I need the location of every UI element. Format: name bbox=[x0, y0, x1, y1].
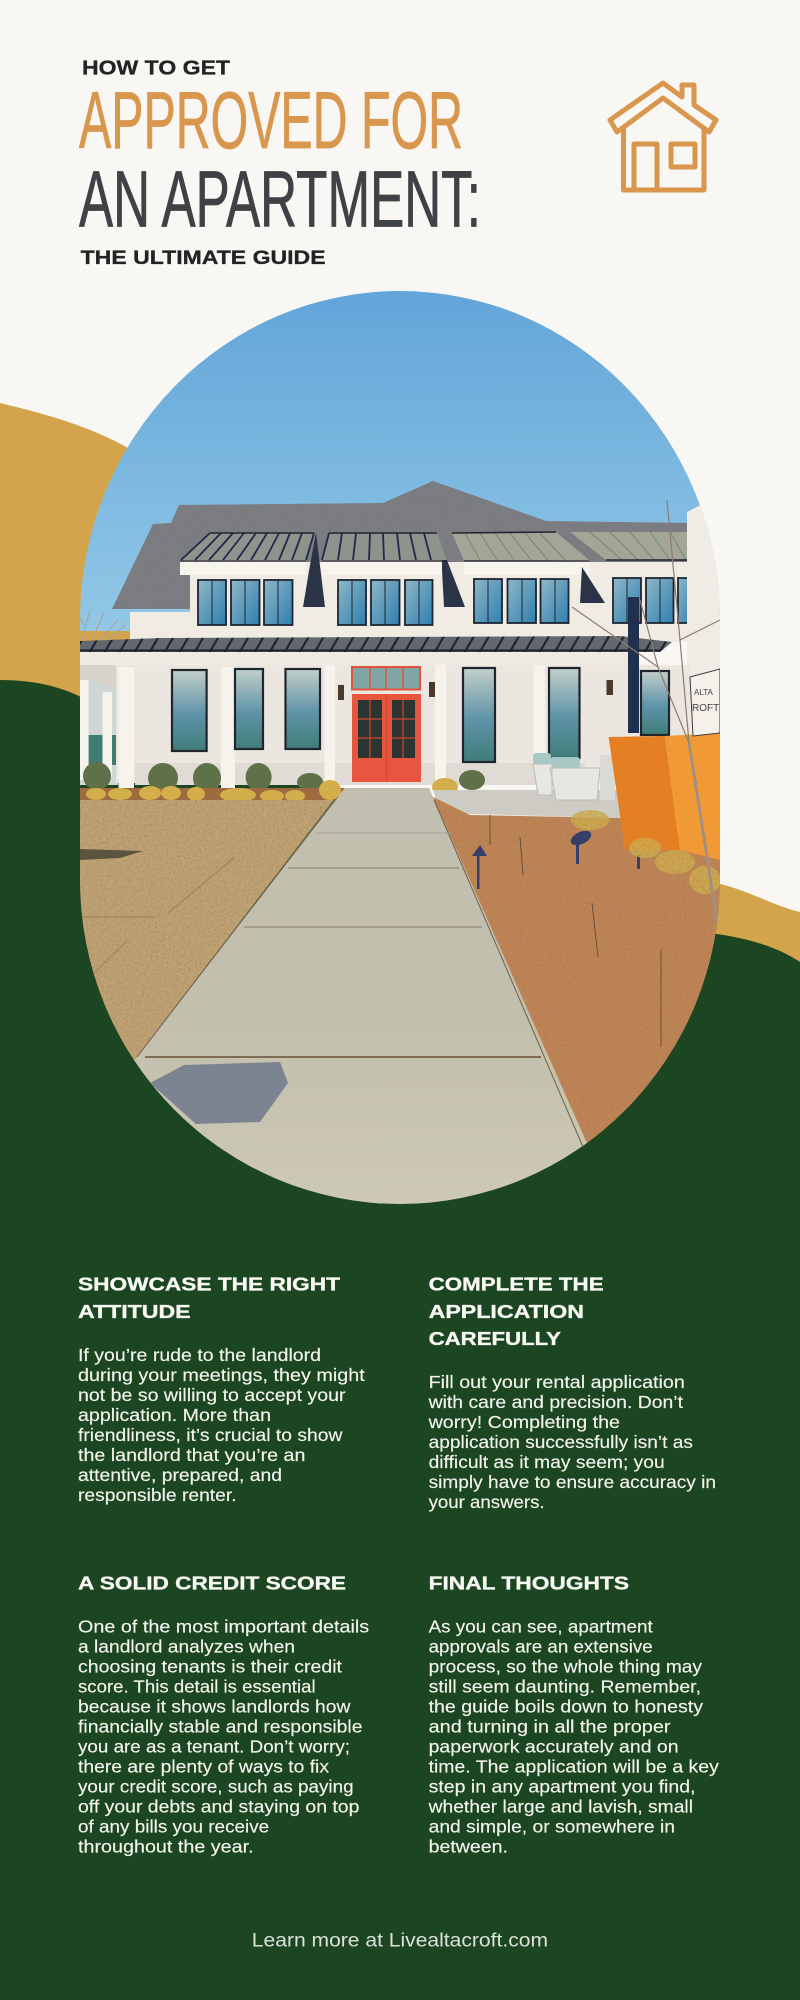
walkway bbox=[100, 788, 590, 1210]
background: dark green lower area bbox=[0, 680, 800, 2000]
body text bbox=[427, 1617, 719, 1857]
ground floor wall bbox=[116, 665, 690, 783]
body text: difficult as it may seem; you bbox=[429, 1452, 665, 1472]
lawn dark patch bbox=[80, 849, 143, 860]
small sprouts in mulch bbox=[490, 815, 661, 1047]
heading: FINAL THOUGHTS bbox=[429, 1572, 629, 1594]
body text: choosing tenants is their credit bbox=[78, 1657, 342, 1677]
stone base bbox=[135, 763, 585, 785]
body text: you are as a tenant. Don’t worry; bbox=[78, 1737, 350, 1757]
background wave: gold left bbox=[0, 403, 135, 720]
body text: If you’re rude to the landlord bbox=[78, 1345, 321, 1365]
title block bbox=[79, 58, 481, 269]
title line: approved for: APPROVED FOR bbox=[79, 76, 463, 166]
yellow plants along the front bbox=[86, 778, 458, 802]
body text: not be so willing to accept your bbox=[78, 1385, 346, 1405]
ground floor windows bbox=[172, 668, 669, 762]
body text: still seem daunting. Remember, bbox=[429, 1677, 701, 1697]
bare tree at right bbox=[572, 500, 720, 923]
bare trees at left bbox=[76, 610, 125, 640]
body text: a landlord analyzes when bbox=[78, 1637, 295, 1657]
heading: CAREFULLY bbox=[429, 1328, 562, 1349]
body text: between. bbox=[429, 1837, 508, 1857]
body text: application successfully isn’t as bbox=[429, 1432, 693, 1452]
bushes bbox=[83, 762, 485, 793]
body text: whether large and lavish, small bbox=[427, 1797, 693, 1817]
upper windows bbox=[198, 578, 693, 625]
text section: showcase the right attitude bbox=[78, 1274, 365, 1505]
front door with transom bbox=[352, 667, 421, 782]
patio concrete bbox=[433, 790, 620, 818]
text section: complete the application carefully bbox=[427, 1274, 716, 1512]
body text: there are plenty of ways to fix bbox=[78, 1757, 329, 1777]
walkway edges and joints bbox=[137, 800, 583, 1147]
porch roof bbox=[80, 636, 672, 652]
heading: SHOWCASE THE RIGHT bbox=[78, 1274, 341, 1295]
landscape lights bbox=[472, 828, 640, 889]
text section: final thoughts bbox=[427, 1572, 719, 1857]
sign: ROFT bbox=[692, 703, 719, 714]
body text bbox=[427, 1372, 716, 1512]
body text: responsible renter. bbox=[78, 1485, 237, 1505]
heading bbox=[429, 1274, 604, 1349]
title line: how to get: HOW TO GET bbox=[82, 58, 230, 80]
body text bbox=[78, 1617, 369, 1857]
text section: a solid credit score bbox=[78, 1572, 369, 1857]
body text: and turning in all the proper bbox=[429, 1717, 671, 1737]
heading: A SOLID CREDIT SCORE bbox=[78, 1572, 346, 1594]
heading: COMPLETE THE bbox=[429, 1274, 604, 1295]
body text: friendliness, it’s crucial to show bbox=[78, 1425, 343, 1445]
body text: score. This detail is essential bbox=[78, 1677, 316, 1697]
sky bbox=[80, 291, 720, 631]
porch fascia bbox=[80, 652, 630, 665]
lamp post bbox=[628, 597, 639, 733]
ground floor columns bbox=[80, 665, 545, 788]
patio chairs bbox=[533, 753, 615, 800]
tree shadow on walkway bbox=[150, 1062, 288, 1124]
body text: step in any apartment you find, bbox=[429, 1777, 696, 1797]
lawn bbox=[80, 800, 335, 1061]
body text bbox=[78, 1345, 365, 1505]
background wave: gold right bbox=[700, 880, 800, 980]
lawn tracks bbox=[80, 857, 235, 973]
orange planter bbox=[609, 733, 720, 860]
body text: As you can see, apartment bbox=[429, 1617, 653, 1637]
body text: your credit score, such as paying bbox=[78, 1777, 354, 1797]
title line: an apartment: AN APARTMENT: bbox=[79, 155, 481, 244]
body text: your answers. bbox=[429, 1492, 545, 1512]
body text: One of the most important details bbox=[78, 1617, 369, 1637]
body text: process, so the whole thing may bbox=[429, 1657, 702, 1677]
photo: apartment building in rounded oval bbox=[76, 291, 721, 1210]
heading: ATTITUDE bbox=[78, 1301, 191, 1322]
dormer metal roofs bbox=[180, 532, 692, 561]
mulch garden bed bbox=[433, 797, 720, 1150]
front garden bed bbox=[80, 788, 345, 800]
body text: the guide boils down to honesty bbox=[429, 1697, 703, 1717]
body text: approvals are an extensive bbox=[429, 1637, 653, 1657]
subtitle: THE ULTIMATE GUIDE bbox=[81, 247, 326, 269]
body text: financially stable and responsible bbox=[78, 1717, 362, 1737]
yellow plants beside planter bbox=[571, 810, 721, 894]
body text: with care and precision. Don’t bbox=[427, 1392, 683, 1412]
body text: because it shows landlords how bbox=[78, 1697, 351, 1717]
body text: of any bills you receive bbox=[78, 1817, 269, 1837]
dormer side wedges bbox=[303, 533, 605, 607]
icon: house outline bbox=[610, 83, 716, 190]
sign bbox=[690, 669, 720, 736]
body text: application. More than bbox=[78, 1405, 271, 1425]
main shingled roof bbox=[112, 481, 692, 609]
body text: worry! Completing the bbox=[427, 1412, 620, 1432]
body text: Fill out your rental application bbox=[429, 1372, 685, 1392]
body text: during your meetings, they might bbox=[78, 1365, 365, 1385]
side building at right bbox=[687, 495, 720, 740]
heading bbox=[78, 1274, 341, 1322]
sign: ALTA bbox=[694, 688, 713, 697]
body text: the landlord that you’re an bbox=[78, 1445, 305, 1465]
wall lanterns bbox=[338, 680, 613, 700]
body text: paperwork accurately and on bbox=[429, 1737, 679, 1757]
body text: attentive, prepared, and bbox=[78, 1465, 282, 1485]
body text: time. The application will be a key bbox=[429, 1757, 719, 1777]
body text: and simple, or somewhere in bbox=[429, 1817, 675, 1837]
left porch view bbox=[80, 680, 118, 785]
body text: simply have to ensure accuracy in bbox=[429, 1472, 716, 1492]
heading: APPLICATION bbox=[429, 1301, 584, 1322]
body text: off your debts and staying on top bbox=[78, 1797, 359, 1817]
body text: throughout the year. bbox=[78, 1837, 254, 1857]
footer: learn more link text: Learn more at Livealtacroft.com bbox=[252, 1931, 548, 1952]
upper wall bbox=[130, 562, 690, 642]
